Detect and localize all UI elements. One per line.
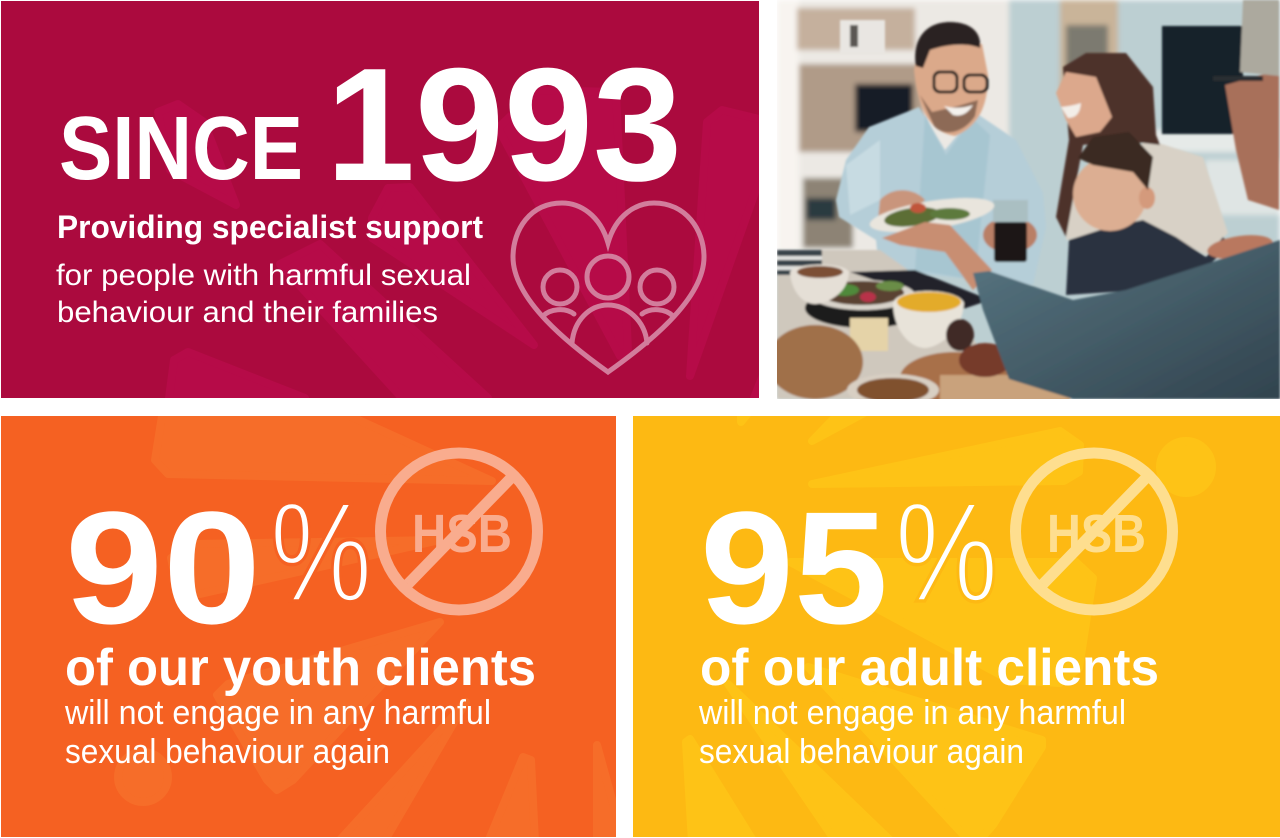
photo: family sharing a meal bbox=[767, 0, 1280, 406]
panel: since 1993 bbox=[1, 1, 763, 398]
panel: youth clients statistic bbox=[1, 416, 620, 838]
icon: no HSB bbox=[1016, 453, 1172, 610]
server's arm and sleeve bbox=[882, 222, 1280, 399]
statistic 95: 95 bbox=[700, 478, 888, 657]
heading: youth clients: of our youth clients bbox=[65, 639, 536, 697]
heading: adult clients: of our adult clients bbox=[700, 639, 1159, 697]
description line 2: behaviour and their families bbox=[57, 296, 438, 329]
table with dishes bbox=[767, 250, 1070, 406]
text line 1: will not engage in any harmful bbox=[698, 694, 1126, 732]
text line 1: will not engage in any harmful bbox=[64, 694, 491, 732]
icon: no HSB: HSB bbox=[412, 504, 512, 564]
text line 2: sexual behaviour again bbox=[699, 733, 1024, 771]
panel: adult clients statistic bbox=[633, 412, 1280, 838]
description line 1: for people with harmful sexual bbox=[56, 259, 471, 292]
subheading: Providing specialist support bbox=[57, 209, 483, 245]
grandfather head bbox=[1213, 0, 1279, 210]
icon: heart with family bbox=[513, 203, 704, 372]
since label: SINCE bbox=[59, 99, 303, 199]
text line 2: sexual behaviour again bbox=[65, 733, 390, 771]
plate of salad bbox=[868, 189, 996, 233]
year 1993: 1993 bbox=[326, 35, 682, 215]
boy bbox=[1066, 132, 1274, 295]
icon: no HSB: HSB bbox=[1047, 504, 1146, 564]
icon: no HSB bbox=[380, 453, 538, 610]
percent sign: % bbox=[270, 473, 372, 632]
glass and hand bbox=[983, 200, 1037, 262]
woman bbox=[1056, 53, 1228, 255]
percent sign: % bbox=[895, 473, 998, 632]
man bbox=[836, 22, 1046, 285]
statistic 90: 90 bbox=[65, 478, 261, 657]
